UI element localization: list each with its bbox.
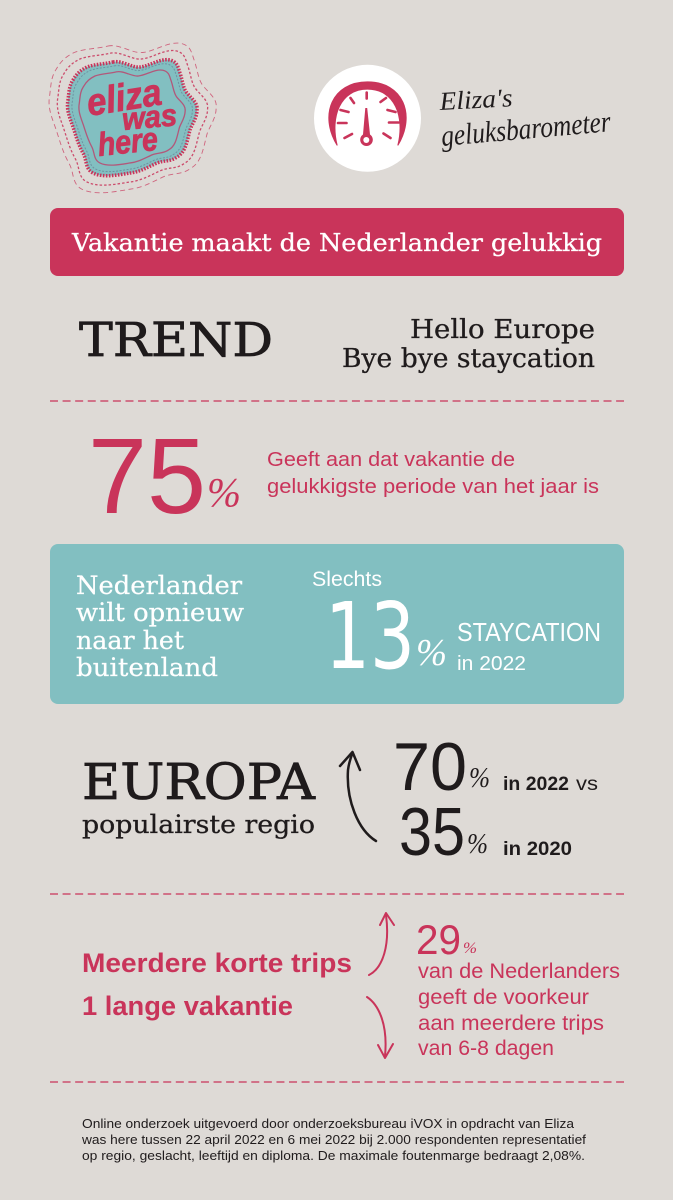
stat: 35 percent 2020: 35 [399, 794, 465, 870]
arrow: up red [369, 913, 394, 975]
stat 75 description [267, 448, 599, 498]
stat: 75 percent: 75 [88, 415, 206, 536]
stat 29 description: geeft de voorkeur [418, 986, 589, 1009]
stat: 70 percent 2022: % [469, 763, 490, 794]
stat 75 description: gelukkigste periode van het jaar is [267, 475, 599, 498]
panel text: Nederlander wilt opnieuw: Nederlander [76, 571, 242, 600]
stat 29 description: van 6-8 dagen [418, 1037, 554, 1060]
footnote: Online onderzoek uitgevoerd door onderzoeksbureau iVOX in opdracht van Eliza [82, 1117, 574, 1131]
stat: 13 percent: 13 [325, 583, 415, 690]
stat: 70 percent 2022: 70 [393, 729, 467, 805]
trend heading: TREND [79, 313, 273, 368]
banner heading [50, 208, 624, 276]
label: staycation in 2022 [457, 617, 601, 675]
icon: happiness barometer gauge [314, 65, 421, 172]
stat: 29 percent: % [463, 940, 477, 957]
handwritten title: Eliza's geluksbarometer [438, 83, 612, 153]
stat 29 description: van de Nederlanders [418, 960, 620, 983]
logo text: was [121, 97, 178, 137]
panel: staycation [50, 544, 624, 704]
heading: Europa: populairste regio [82, 810, 315, 839]
stat: 70 percent 2022: in 2022 [503, 774, 569, 795]
stat 29 description: aan meerdere trips [418, 1012, 604, 1035]
stat: 13 percent: % [416, 632, 447, 674]
logo text: eliza [84, 72, 164, 125]
footnote [81, 1117, 587, 1163]
logo text [84, 72, 178, 163]
label: staycation in 2022: in 2022 [457, 652, 526, 675]
label: Slechts: Slechts [312, 568, 382, 591]
label: staycation in 2022: STAYCATION [457, 617, 601, 647]
logo text: here [96, 120, 159, 163]
footnote: was here tussen 22 april 2022 en 6 mei 2022 bij 2.000 respondenten representatief [81, 1133, 587, 1147]
footnote: op regio, geslacht, leeftijd en diploma. De maximale foutenmarge bedraagt 2,08%. [82, 1149, 585, 1163]
comparison labels: trips: 1 lange vakantie [82, 991, 293, 1021]
panel text: Nederlander wilt opnieuw: naar het [76, 626, 184, 655]
trend subtitle: Hello Europe [410, 315, 595, 345]
stat: 29 percent: 29 [416, 916, 461, 963]
trend subtitle [342, 315, 595, 374]
panel text: Nederlander wilt opnieuw: wilt opnieuw [76, 598, 245, 627]
banner heading: Vakantie maakt de Nederlander gelukkig [71, 229, 602, 257]
stat: 70 percent 2022: vs [576, 774, 598, 795]
stat: 75 percent: % [207, 469, 241, 515]
arrow: upward black [340, 752, 376, 841]
arrow: down red [367, 997, 393, 1058]
stat: 35 percent 2020 [399, 794, 572, 870]
stat: 35 percent 2020: in 2020 [503, 839, 572, 860]
heading: Europa: EUROPA [82, 753, 316, 811]
panel text: Nederlander wilt opnieuw: buitenland [76, 653, 218, 682]
comparison labels: trips: Meerdere korte trips [82, 948, 352, 978]
panel text: Nederlander wilt opnieuw [76, 571, 245, 682]
heading: Europa [82, 753, 316, 839]
handwritten title: Eliza's geluksbarometer: Eliza's [438, 83, 513, 116]
stat 29 description [418, 960, 620, 1060]
stat 75 description: Geeft aan dat vakantie de [267, 448, 515, 471]
comparison labels: trips [82, 948, 352, 1021]
trend subtitle: Bye bye staycation [342, 344, 595, 374]
stat: 35 percent 2020: % [467, 829, 488, 860]
stat: 70 percent 2022 [393, 729, 598, 805]
logo: Eliza was here [49, 43, 216, 193]
handwritten title: Eliza's geluksbarometer: geluksbarometer [440, 105, 612, 153]
